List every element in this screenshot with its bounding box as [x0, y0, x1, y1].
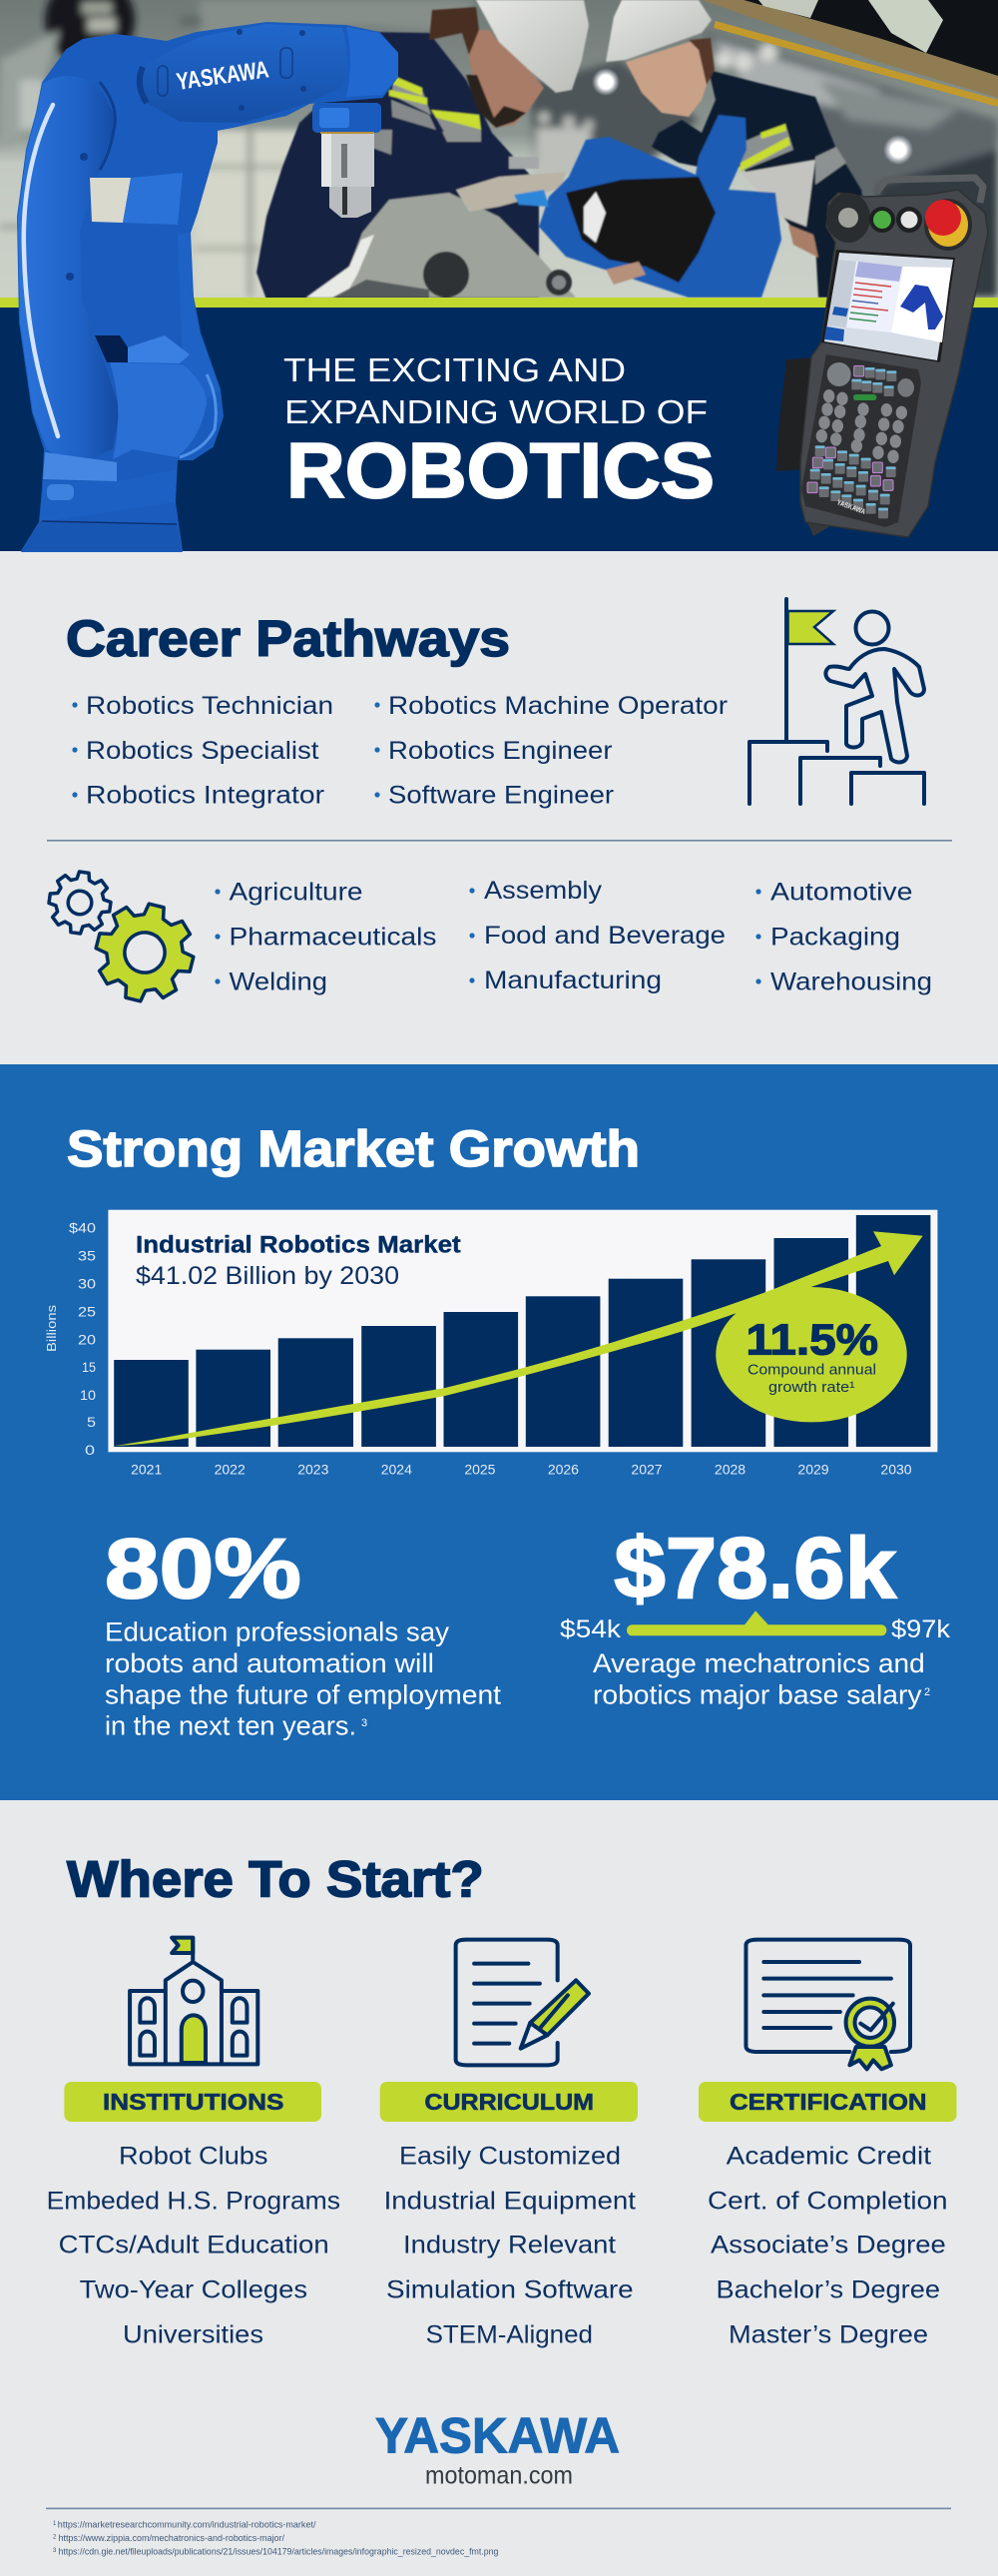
stat: 80 percent: shape the future of employment [105, 1680, 502, 1710]
arm elbow joint [110, 362, 207, 459]
arm left link [18, 76, 120, 466]
list: certification: Cert. of Completion [708, 2188, 948, 2216]
list: curriculum: STEM-Aligned [426, 2321, 593, 2349]
industry list: Assembly [484, 877, 603, 905]
x axis labels: 2028 [715, 1462, 746, 1478]
list: curriculum: Easily Customized [399, 2143, 621, 2171]
stat: 80 percent: in the next ten years. [105, 1710, 356, 1740]
y axis labels: 10 [80, 1387, 96, 1403]
factory background [0, 0, 998, 298]
divider [47, 840, 952, 842]
title: EXPANDING WORLD OF [284, 393, 708, 430]
x axis labels: 2023 [297, 1462, 329, 1478]
pendant controls [826, 193, 972, 251]
stat: salary: robotics major base salary [593, 1680, 922, 1710]
callout: growth rate: growth rate¹ [768, 1379, 854, 1396]
industry list: Packaging [770, 924, 900, 952]
arm gripper [312, 103, 381, 218]
stat: salary: $78.6k [614, 1521, 896, 1616]
list: certification: Master’s Degree [729, 2321, 928, 2349]
stat: salary [560, 1521, 951, 1710]
career list: Robotics Machine Operator [388, 692, 728, 720]
y axis labels: 20 [78, 1332, 96, 1348]
y axis labels: 25 [78, 1304, 96, 1320]
panel: where to start [47, 1850, 957, 2349]
heading: Strong Market Growth [67, 1120, 640, 1177]
y axis title: Billions [44, 1304, 59, 1352]
lime band [0, 298, 998, 308]
footnotes: 2 [53, 2534, 57, 2540]
gripped hand and machine part [306, 115, 781, 298]
salary range bar [560, 1610, 951, 1643]
x axis labels: 2025 [464, 1462, 496, 1478]
footnotes: https://cdn.gie.net/fileuploads/publications/21/issues/104179/articles/images/infographic_resized_novdec_fmt.png [58, 2546, 498, 2557]
list: curriculum [384, 2143, 636, 2349]
career list: Robotics Specialist [86, 737, 319, 765]
x axis labels: 2027 [631, 1462, 663, 1478]
website: motoman.com [425, 2462, 573, 2490]
title: THE EXCITING AND [283, 351, 626, 388]
arm head [140, 24, 347, 123]
man in hard hat [256, 0, 589, 300]
pendant keypad [801, 354, 921, 527]
label: institutions: INSTITUTIONS [103, 2089, 283, 2115]
x axis labels [131, 1462, 912, 1478]
arm base [43, 452, 117, 481]
list: certification [708, 2143, 948, 2349]
salary range bar: $54k [560, 1615, 622, 1643]
pendant screen [821, 250, 955, 362]
label: certification [699, 2082, 956, 2122]
industry list: Food and Beverage [484, 922, 726, 950]
footnotes [53, 2520, 498, 2557]
salary range bar: $97k [891, 1615, 951, 1643]
career list [72, 692, 728, 809]
callout: growth rate: Compound annual [748, 1362, 876, 1379]
stat: 80 percent: 3 [361, 1717, 367, 1729]
stat: 80 percent: Education professionals say [105, 1616, 450, 1646]
callout: growth rate [716, 1287, 907, 1422]
list: curriculum: Industrial Equipment [384, 2188, 636, 2216]
list: certification: Academic Credit [727, 2143, 931, 2171]
hero banner [0, 0, 998, 551]
panel: career pathways [66, 599, 924, 809]
chart title: Industrial Robotics Market [136, 1231, 461, 1258]
list: institutions: Robot Clubs [119, 2143, 267, 2171]
list: certification: Bachelor’s Degree [717, 2276, 940, 2304]
industry list: Welding [230, 968, 327, 996]
icon: gears [45, 868, 204, 1011]
woman in hard hat [606, 0, 878, 298]
label: institutions [64, 2082, 321, 2122]
stat: 80 percent [105, 1522, 502, 1740]
list: institutions: Two-Year Colleges [80, 2276, 307, 2304]
list: curriculum: Industry Relevant [403, 2232, 616, 2259]
industry list [215, 877, 932, 996]
industry list: Pharmaceuticals [230, 924, 437, 952]
y axis labels: 0 [85, 1442, 95, 1458]
y axis labels: 15 [82, 1359, 96, 1375]
stat: 80 percent: 80% [105, 1522, 301, 1615]
footnotes: 3 [53, 2548, 57, 2554]
panel: strong market growth [0, 1064, 998, 1800]
navy title band [0, 308, 998, 551]
bars [114, 1215, 930, 1447]
y axis labels: 30 [78, 1276, 96, 1292]
icon: document and pencil [456, 1940, 589, 2065]
title [283, 351, 715, 514]
industry list: Automotive [770, 879, 912, 907]
label: curriculum: CURRICULUM [424, 2089, 594, 2115]
footer logo: YASKAWA [375, 2408, 620, 2464]
teach pendant [776, 178, 988, 537]
heading: Career Pathways [66, 610, 510, 667]
y axis labels: $40 [69, 1220, 96, 1236]
footnotes: https://marketresearchcommunity.com/industrial-robotics-market/ [58, 2520, 316, 2531]
panel: industries [45, 868, 932, 1011]
list: institutions [47, 2143, 340, 2349]
list: institutions: Embeded H.S. Programs [47, 2188, 340, 2216]
stat: salary: Average mechatronics and [593, 1648, 925, 1678]
stat: salary: 2 [924, 1686, 930, 1698]
career list: Robotics Engineer [388, 737, 613, 765]
callout: growth rate: 11.5% [747, 1316, 878, 1365]
industry list: Agriculture [230, 879, 363, 907]
bar chart: industrial robotics market [44, 1210, 937, 1478]
footnotes: https://www.zippia.com/mechatronics-and-robotics-major/ [58, 2533, 284, 2544]
icon: person climbing steps to flag [749, 599, 924, 804]
list: institutions: Universities [123, 2321, 263, 2349]
list: certification: Associate’s Degree [711, 2232, 946, 2259]
career list: Robotics Technician [86, 692, 333, 720]
y axis labels: 35 [78, 1248, 96, 1264]
stat: 80 percent: robots and automation will [105, 1648, 434, 1678]
x axis labels: 2022 [215, 1462, 246, 1478]
icon: school building [130, 1937, 257, 2064]
list: institutions: CTCs/Adult Education [59, 2232, 329, 2259]
career list: Robotics Integrator [86, 781, 324, 809]
industry list: Warehousing [770, 968, 932, 996]
y axis labels [69, 1220, 96, 1458]
label: curriculum [380, 2082, 638, 2122]
x axis labels: 2029 [797, 1462, 829, 1478]
chart value: $41.02 Billion by 2030 [136, 1262, 399, 1290]
footnotes: 1 [53, 2521, 57, 2527]
arm window openings [90, 178, 131, 223]
pendant logo: YASKAWA [835, 497, 867, 516]
divider [46, 2508, 951, 2509]
arm logo: YASKAWA [175, 56, 270, 96]
label: certification: CERTIFICATION [730, 2089, 927, 2115]
heading: Where To Start? [67, 1850, 484, 1907]
industry list: Manufacturing [484, 966, 662, 994]
list: curriculum: Simulation Software [386, 2276, 634, 2304]
x axis labels: 2026 [548, 1462, 579, 1478]
y axis labels: 5 [87, 1414, 96, 1430]
x axis labels: 2030 [880, 1462, 912, 1478]
x axis labels: 2021 [131, 1462, 162, 1478]
ceiling beam and dark roof [592, 0, 998, 165]
title: ROBOTICS [286, 426, 715, 514]
career list: Software Engineer [388, 781, 614, 809]
hero photo: technicians working on robot [0, 0, 998, 300]
icon: certificate with badge [746, 1940, 910, 2069]
x axis labels: 2024 [381, 1462, 412, 1478]
robot arm [18, 23, 398, 551]
arrow: growth trend [114, 1231, 923, 1446]
